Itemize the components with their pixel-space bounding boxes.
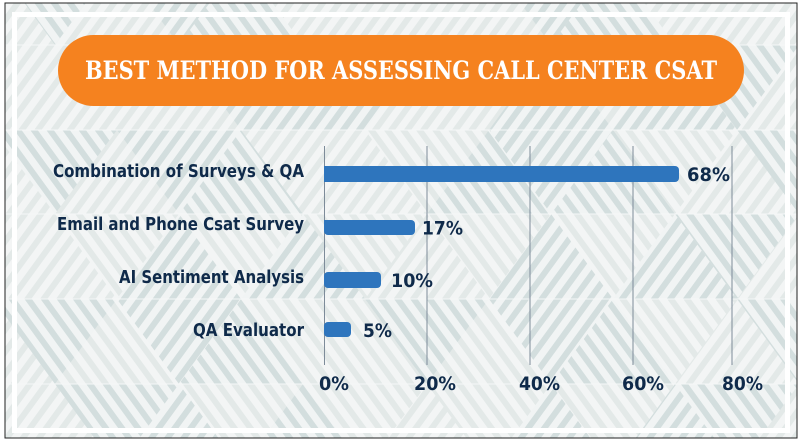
axis label: 60%: 60% <box>622 373 664 395</box>
category label: QA Evaluator: QA Evaluator <box>193 321 304 341</box>
title banner <box>58 35 744 106</box>
category label: Email and Phone Csat Survey: Email and Phone Csat Survey <box>57 215 305 235</box>
bar: 68% <box>324 166 679 182</box>
value label: 5%: 5% <box>363 320 392 342</box>
category label: AI Sentiment Analysis: AI Sentiment Analysis <box>119 268 304 288</box>
gridlines <box>324 146 732 365</box>
bar: 17% <box>324 220 415 235</box>
axis label: 40%: 40% <box>519 373 560 395</box>
axis label: 20%: 20% <box>414 373 456 395</box>
value label: 68%: 68% <box>687 164 730 186</box>
bar: 5% <box>324 322 351 337</box>
axis label: 0%: 0% <box>319 373 349 395</box>
category label: Combination of Surveys & QA: Combination of Surveys & QA <box>53 162 304 182</box>
bar: 10% <box>324 272 381 288</box>
value label: 10%: 10% <box>391 270 433 292</box>
bar chart <box>53 146 763 395</box>
value label: 17%: 17% <box>422 218 463 240</box>
axis label: 80%: 80% <box>722 373 763 395</box>
